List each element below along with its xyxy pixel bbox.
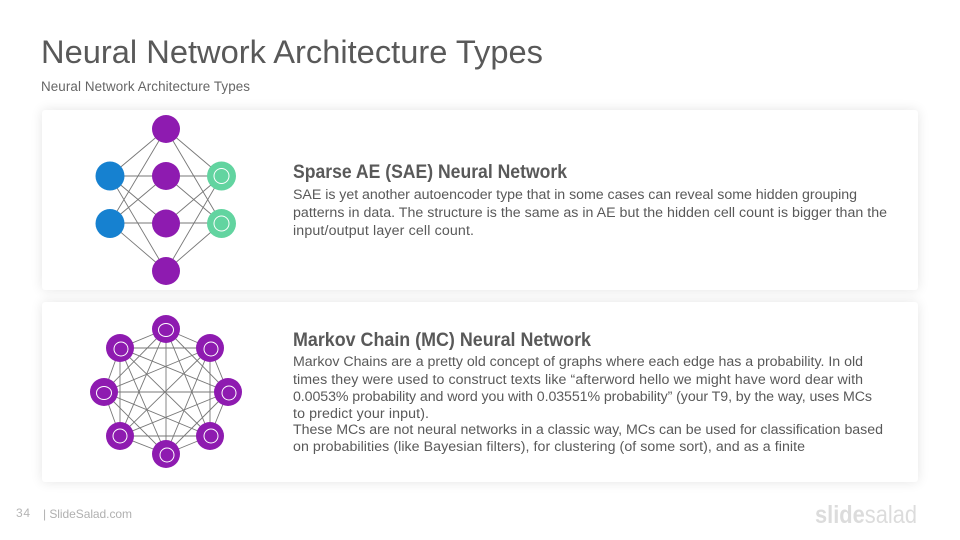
title: Neural Network Architecture Types: [41, 34, 543, 70]
subtitle: Neural Network Architecture Types: [41, 79, 250, 94]
heading: sparse AE: Sparse AE (SAE) Neural Network: [293, 162, 567, 183]
page number: 34: [16, 506, 30, 520]
text block: markov chain description: 0.0053% probability and word you with 0.03551% probability” (your T9, by the way, uses MCs: [293, 389, 872, 405]
text block: markov chain description: These MCs are not neural networks in a classic way, MCs can be used for classification based: [293, 422, 883, 438]
text block: sparse AE description: [293, 187, 887, 239]
panel: sparse autoencoder: [42, 110, 918, 290]
text block: markov chain description: on probabilities (like Bayesian filters), for clustering (of some sort), and as a finite: [293, 439, 805, 455]
text block: markov chain description: to predict your input).: [293, 406, 429, 422]
text block: markov chain description: [293, 354, 883, 455]
text block: sparse AE description: SAE is yet another autoencoder type that in some cases can reveal some hidden grouping: [293, 187, 857, 203]
panel: markov chain: [42, 302, 918, 482]
text block: markov chain description: Markov Chains are a pretty old concept of graphs where each edge has a probability. In old: [293, 354, 863, 370]
text block: sparse AE description: input/output layer cell count.: [293, 223, 474, 239]
diagram: markov chain network: [90, 315, 242, 468]
text block: markov chain description: times they were used to construct texts like “afterword hello we might have word dear with: [293, 372, 863, 388]
heading: markov chain: Markov Chain (MC) Neural Network: [293, 330, 591, 351]
logo: slidesalad: slidesalad: [815, 501, 917, 529]
diagram: sparse AE network: [96, 115, 236, 285]
text block: sparse AE description: patterns in data. The structure is the same as in AE but the hidden cell count is bigger than the: [293, 205, 887, 221]
footer source: | SlideSalad.com: [43, 507, 132, 521]
